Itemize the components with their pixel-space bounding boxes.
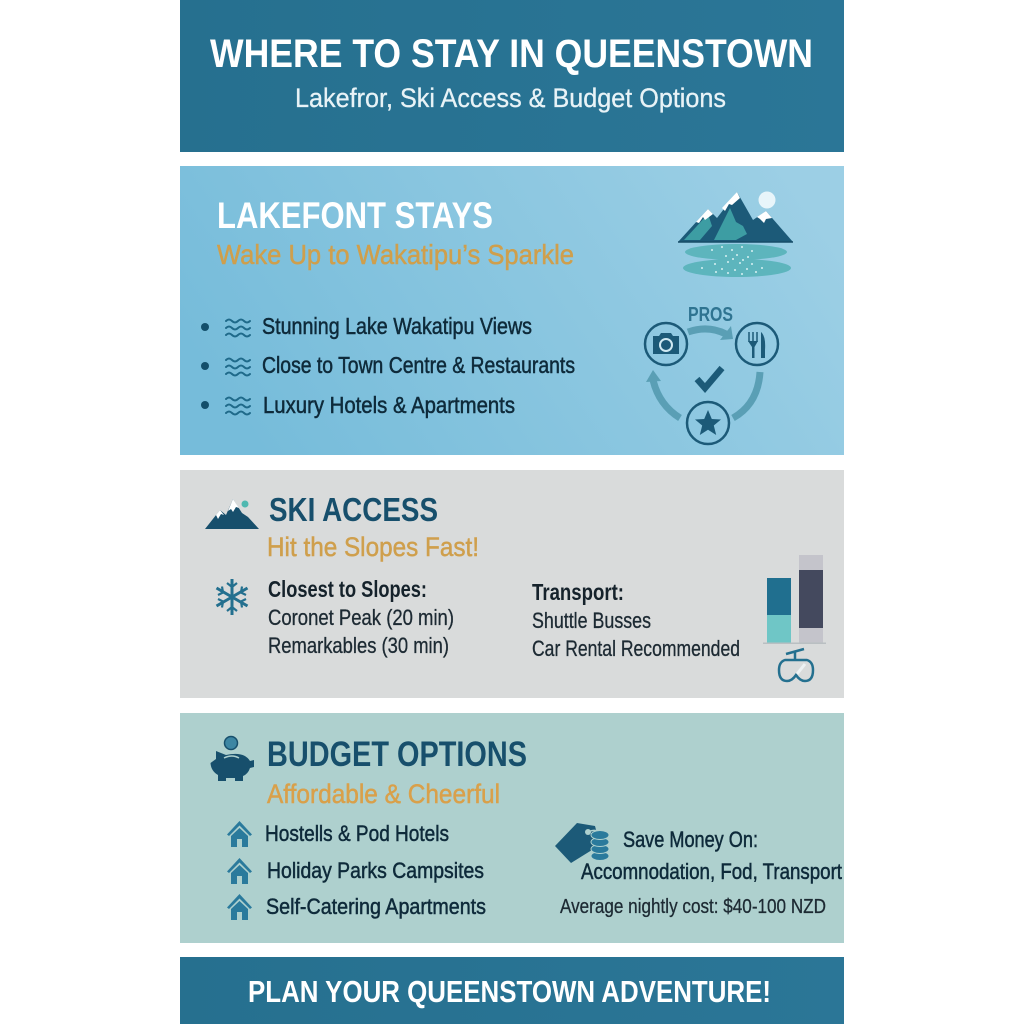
lakefront tagline: Wake Up to Wakatipu’s Sparkle bbox=[217, 239, 574, 270]
transport text: Transport: bbox=[532, 579, 624, 605]
pros cycle diagram bbox=[645, 304, 778, 444]
budget heading: BUDGET OPTIONS bbox=[267, 735, 527, 774]
footer banner bbox=[180, 957, 844, 1024]
closest to slopes text: Coronet Peak (20 min) bbox=[268, 605, 454, 630]
budget list: Self-Catering Apartments bbox=[266, 894, 486, 919]
budget list: Holiday Parks Campsites bbox=[267, 858, 484, 883]
closest to slopes text bbox=[268, 576, 454, 658]
savings text: Save Money On: bbox=[623, 827, 758, 852]
subtitle: Lakefror, Ski Access & Budget Options bbox=[295, 83, 726, 113]
icon: ski goggles bbox=[779, 649, 813, 681]
panel: budget options bbox=[180, 713, 844, 943]
cycle arrows bbox=[653, 329, 760, 418]
budget tagline: Affordable & Cheerful bbox=[267, 779, 500, 809]
pros label: PROS bbox=[688, 304, 733, 326]
closest to slopes text: Closest to Slopes: bbox=[268, 576, 427, 602]
title: WHERE TO STAY IN QUEENSTOWN bbox=[210, 32, 813, 76]
icon: piggy bank bbox=[210, 736, 254, 781]
panel: ski access bbox=[180, 470, 844, 698]
lakefront list: Close to Town Centre & Restaurants bbox=[262, 352, 575, 378]
icon: fork and knife bbox=[736, 323, 778, 365]
lakefront list: Stunning Lake Wakatipu Views bbox=[262, 313, 532, 339]
arrowheads bbox=[646, 326, 733, 382]
bar chart bbox=[763, 555, 826, 644]
savings text: Accomnodation, Fod, Transport bbox=[581, 859, 843, 884]
icon: mountains and lake bbox=[678, 192, 793, 277]
ski tagline: Hit the Slopes Fast! bbox=[267, 532, 479, 562]
transport text: Shuttle Busses bbox=[532, 608, 651, 633]
savings text: Average nightly cost: $40-100 NZD bbox=[560, 895, 826, 918]
panel: lakefront stays bbox=[180, 166, 844, 455]
footer text: PLAN YOUR QUEENSTOWN ADVENTURE! bbox=[248, 974, 771, 1009]
lakefront heading: LAKEFONT STAYS bbox=[217, 195, 493, 236]
icon: price tag and coins bbox=[555, 823, 609, 863]
icon: check mark bbox=[697, 368, 722, 388]
closest to slopes text: Remarkables (30 min) bbox=[268, 633, 449, 658]
icon: star bbox=[687, 402, 729, 444]
icon: snowflake bbox=[216, 579, 248, 615]
transport text bbox=[532, 579, 740, 661]
lakefront list bbox=[201, 313, 575, 418]
icon: ski mountain bbox=[205, 499, 259, 529]
transport text: Car Rental Recommended bbox=[532, 636, 740, 661]
header banner bbox=[180, 0, 844, 152]
ski heading: SKI ACCESS bbox=[269, 491, 438, 528]
icon: camera bbox=[645, 323, 687, 365]
budget list bbox=[227, 821, 486, 920]
savings text bbox=[560, 827, 843, 918]
budget list: Hostells & Pod Hotels bbox=[265, 821, 449, 846]
lakefront list: Luxury Hotels & Apartments bbox=[263, 392, 515, 418]
